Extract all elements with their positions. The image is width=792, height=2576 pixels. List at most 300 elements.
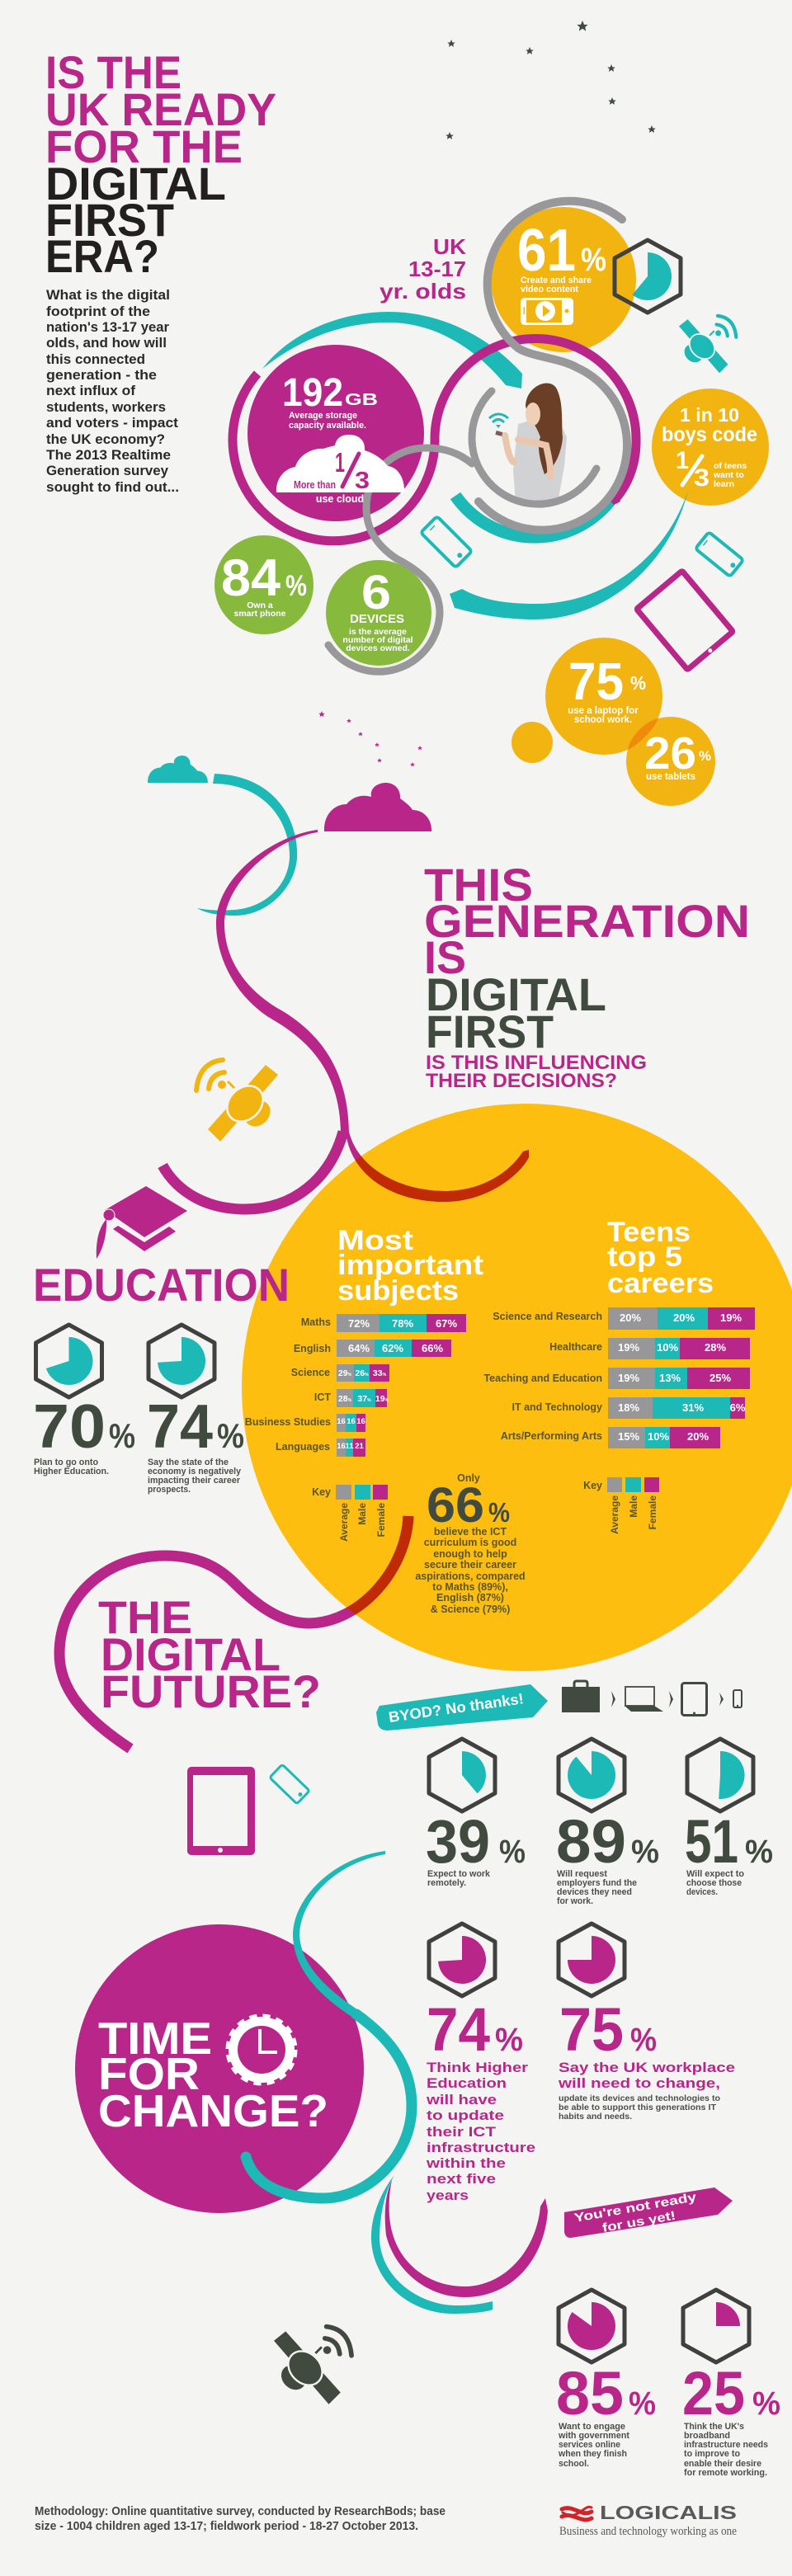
intro text block: generation - the — [46, 367, 157, 383]
stat: 84 percent smart phone: Own a — [247, 600, 273, 610]
stat: 51 percent: Will expect to — [686, 1869, 744, 1879]
row: english: 64% — [348, 1342, 370, 1354]
title: FIRST — [45, 194, 174, 246]
connector: teal arc top — [262, 312, 522, 389]
hexagon pie 51 — [687, 1739, 753, 1811]
row: arts and performing arts: 20% — [687, 1430, 709, 1443]
methodology footnote — [35, 2504, 446, 2533]
stat: 39 percent: remotely. — [427, 1878, 466, 1888]
bar chart: most important subjects — [245, 1314, 466, 1457]
stat: 61 percent video content: Create and share — [521, 275, 592, 285]
icon: teal satellite — [679, 316, 736, 373]
label: UK 13-17 yr. olds: UK — [433, 234, 466, 259]
disc: time for change — [75, 1924, 364, 2213]
stat: 74 percent higher education: Education — [427, 2076, 507, 2091]
icon: magenta cloud — [324, 783, 431, 831]
row: it and technology: IT and Technology — [512, 1401, 602, 1413]
row: ict: 37% — [357, 1394, 371, 1404]
row: ict — [314, 1389, 389, 1407]
stat: 39 percent: Expect to work — [427, 1869, 491, 1879]
stat: 74 percent: Say the state of the — [148, 1458, 229, 1467]
stat: 61 percent video content: video content — [521, 285, 578, 294]
row: teaching and education: 13% — [659, 1372, 681, 1384]
stat: 85 percent government services: services online — [559, 2440, 620, 2450]
hexagon pie: 61 percent — [615, 240, 681, 313]
heading: the digital future — [98, 1591, 321, 1717]
stat: 1 in 10 boys code: 1 in 10 — [680, 404, 739, 426]
row: science and research: 20% — [620, 1312, 641, 1324]
hexagon pie 85 — [559, 2290, 625, 2362]
icon: gear clock — [228, 2016, 295, 2084]
row: business studies: 16 — [356, 1417, 365, 1426]
stat: 89 percent: 89 — [556, 1807, 626, 1876]
title: UK READY — [45, 83, 276, 135]
hexagon pie 89 — [559, 1739, 625, 1811]
row: english — [294, 1340, 451, 1357]
row: science and research: Science and Research — [493, 1311, 602, 1322]
legend: careers key: Male — [628, 1495, 639, 1518]
stat: six devices green circle: is the average — [349, 627, 407, 637]
icon: teal phone right — [695, 532, 743, 577]
legend: careers key: Female — [647, 1495, 658, 1529]
intro text block — [46, 287, 179, 495]
row: teaching and education: Teaching and Education — [483, 1373, 602, 1384]
stat: 1 in 10 boys code: learn — [714, 479, 734, 489]
stat: 85 percent government services: % — [629, 2385, 656, 2422]
stat: only 66 percent ICT curriculum: believe the ICT — [434, 1526, 507, 1538]
stat: 51 percent: devices. — [686, 1887, 718, 1897]
stat: 74 percent: % — [217, 1416, 244, 1455]
intro text block: Generation survey — [46, 463, 169, 478]
connector: teal arc from cloud — [197, 774, 297, 916]
icon: tablet — [681, 1683, 706, 1716]
connector: red overlap of curve on yellow circle — [346, 1516, 414, 1615]
stat: 89 percent: employers fund the — [557, 1878, 637, 1888]
legend: subjects key: Male — [356, 1503, 368, 1525]
stat: 75 percent laptop and 26 percent tablets circles: use tablets — [646, 772, 695, 782]
title: ERA? — [45, 230, 159, 282]
stat: 74 percent: 74 — [147, 1392, 213, 1461]
heading: the digital future: DIGITAL — [101, 1628, 280, 1680]
hexagon pie 75 magenta — [559, 1924, 625, 1996]
stat: 39 percent: % — [499, 1834, 526, 1870]
stat: 89 percent: Will request — [557, 1869, 607, 1879]
stat: 85 percent government services: 85 — [556, 2359, 624, 2428]
icon: laptop — [625, 1687, 663, 1712]
row: science: 33% — [373, 1368, 387, 1378]
icon: teal phone — [421, 516, 472, 567]
legend: subjects key — [312, 1485, 388, 1542]
stat: only 66 percent ICT curriculum: & Science (79%) — [431, 1604, 510, 1615]
row: science and research: 20% — [673, 1312, 695, 1324]
row: languages: Languages — [276, 1441, 330, 1453]
icon: magenta tablet — [637, 571, 734, 671]
connector: magenta curve around digital future — [59, 1516, 408, 1749]
hexagon pie 70 — [36, 1325, 102, 1397]
heading: most important subjects: subjects — [337, 1275, 459, 1307]
stat: 74 percent higher education: will have — [426, 2093, 497, 2107]
stat: 89 percent: for work. — [557, 1896, 593, 1906]
stat: 1 in 10 boys code: boys code — [662, 423, 757, 446]
stat: 74 percent higher education: 74 — [427, 1995, 490, 2064]
row: ict: 19% — [375, 1394, 389, 1404]
stat: 84 percent smart phone — [214, 535, 314, 634]
subheading: is this influencing their decisions — [426, 1052, 647, 1092]
heading: teens top 5 careers: careers — [607, 1268, 714, 1299]
connector: grey ring from 61 percent circle round the photo — [478, 201, 627, 530]
stat: 51 percent: choose those — [686, 1878, 742, 1888]
legend: subjects key: Average — [338, 1503, 350, 1542]
legend: careers key — [583, 1477, 659, 1534]
logo: Logicalis: Business and technology working as one — [559, 2525, 737, 2538]
stat: only 66 percent ICT curriculum: % — [488, 1497, 510, 1528]
stat: 74 percent — [147, 1325, 244, 1495]
heading: this generation is digital first: FIRST — [426, 1005, 554, 1057]
heading: teens top 5 careers — [607, 1217, 714, 1299]
heading: this generation is digital first: IS — [424, 931, 466, 983]
hexagon pie 39 — [429, 1739, 495, 1811]
stat: 74 percent: impacting their career — [148, 1476, 241, 1486]
stat: 74 percent higher education: % — [495, 2022, 523, 2058]
row: science: 26% — [355, 1368, 369, 1378]
stat: 75 percent laptop and 26 percent tablets circles — [512, 638, 715, 806]
heading: education: EDUCATION — [33, 1259, 290, 1311]
legend: careers key: Key — [583, 1480, 602, 1491]
stat: 75 percent laptop and 26 percent tablets circles: % — [699, 748, 711, 764]
connector: teal lower swoosh — [450, 491, 688, 619]
stat: 70 percent: Plan to go onto — [34, 1458, 98, 1467]
stat: six devices green circle — [326, 560, 431, 666]
banner: BYOD no thanks — [376, 1684, 548, 1731]
row: teaching and education: 19% — [618, 1372, 639, 1384]
row: maths: 72% — [348, 1317, 370, 1330]
stat: only 66 percent ICT curriculum: enough to help — [433, 1548, 507, 1560]
stat: 89 percent: devices they need — [557, 1887, 632, 1897]
big yellow circle — [242, 1104, 792, 1671]
stat: 51 percent — [685, 1739, 773, 1897]
heading: teens top 5 careers: Teens — [607, 1217, 691, 1248]
row: healthcare: 19% — [618, 1341, 639, 1354]
row: arts and performing arts — [501, 1427, 720, 1448]
stat: 25 percent broadband: enable their desire — [684, 2459, 761, 2469]
stat: only 66 percent ICT curriculum: to Maths (89%), — [432, 1581, 508, 1593]
row: arts and performing arts: 15% — [618, 1430, 639, 1443]
label: UK 13-17 yr. olds — [380, 234, 466, 304]
intro text block: olds, and how will — [46, 335, 167, 351]
stat: 61 percent video content: 61 — [517, 218, 576, 284]
stat: six devices green circle: 6 — [361, 566, 391, 619]
stat: 75 percent laptop and 26 percent tablets circles: % — [630, 672, 646, 694]
label: UK 13-17 yr. olds: yr. olds — [380, 279, 466, 304]
stat disc: 192GB storage: Average storage — [289, 411, 357, 421]
connector: red overlap on yellow circle — [355, 1150, 529, 1202]
stars: dark cluster — [446, 21, 656, 139]
icon: white cloud, more than one third use cloud: More than — [294, 478, 336, 491]
stat disc: 192GB storage: capacity available. — [289, 421, 366, 431]
row: healthcare: Healthcare — [549, 1341, 602, 1353]
photo illustration: girl with phone — [495, 383, 567, 503]
stat: 1 in 10 boys code: 1 — [676, 447, 689, 474]
stat: six devices green circle: devices owned. — [346, 643, 410, 653]
stat: 74 percent higher education: years — [427, 2188, 469, 2203]
banner: you're not ready for us yet — [564, 2187, 733, 2238]
heading: this generation is digital first: THIS — [424, 859, 533, 911]
icon: dark satellite — [274, 2327, 351, 2404]
stat: only 66 percent ICT curriculum: secure their career — [424, 1559, 516, 1571]
title: IS THE — [45, 46, 182, 98]
row: languages: 16 — [337, 1442, 346, 1451]
stat: 74 percent: economy is negatively — [148, 1467, 242, 1476]
connector: grey S curve from photo to devices — [328, 448, 472, 671]
stat: 70 percent: Higher Education. — [34, 1467, 109, 1476]
stat: 75 percent laptop and 26 percent tablets circles: 75 — [568, 652, 624, 711]
stat: 1 in 10 boys code: of teens — [714, 461, 747, 471]
stat: 70 percent — [33, 1325, 135, 1476]
banner: you're not ready for us yet: for us yet! — [601, 2209, 676, 2235]
connector: magenta lower arc — [385, 2180, 548, 2297]
stat: 61 percent video content — [491, 207, 636, 352]
subheading: is this influencing their decisions: IS THIS INFLUENCING — [426, 1052, 647, 1074]
row: it and technology: 31% — [682, 1401, 704, 1414]
icon: briefcase — [562, 1681, 600, 1712]
subheading: is this influencing their decisions: THEIR DECISIONS? — [426, 1070, 617, 1092]
heading: the digital future: FUTURE? — [101, 1665, 321, 1717]
row: science: 29% — [338, 1368, 352, 1378]
title — [45, 46, 276, 282]
stat: 25 percent broadband: to improve to — [684, 2449, 740, 2459]
stat: 85 percent government services — [556, 2290, 656, 2469]
stat: 25 percent broadband: Think the UK's — [684, 2422, 744, 2432]
heading: this generation is digital first: GENERATION — [424, 895, 750, 947]
heading: the digital future: THE — [98, 1591, 192, 1643]
row: arts and performing arts: 10% — [648, 1430, 669, 1443]
hexagon pie 74 magenta — [429, 1924, 495, 1996]
intro text block: this connected — [46, 351, 145, 367]
icon: teal cloud — [148, 756, 208, 783]
intro text block: the UK economy? — [46, 431, 165, 447]
row: english: English — [294, 1343, 331, 1354]
connector: magenta arc left of satellite — [163, 1132, 343, 1209]
stat: 75 percent UK workplace: habits and needs. — [559, 2112, 632, 2122]
stat: 74 percent higher education: next five — [427, 2172, 496, 2187]
stat: 70 percent: 70 — [33, 1392, 106, 1461]
stat: only 66 percent ICT curriculum: curriculum is good — [424, 1537, 516, 1548]
methodology footnote: size - 1004 children aged 13-17; fieldwork period - 18-27 October 2013. — [35, 2519, 418, 2533]
stat: only 66 percent ICT curriculum: Only — [457, 1472, 480, 1484]
icon: white cloud, more than one third use cloud: use cloud — [316, 493, 364, 505]
bar chart: teens top 5 careers — [483, 1307, 755, 1448]
row: languages: 11 — [345, 1442, 354, 1451]
intro text block: next influx of — [46, 383, 135, 398]
stat: 1 in 10 boys code — [652, 389, 769, 506]
row: science and research — [493, 1307, 755, 1330]
intro text block: and voters - impact — [46, 415, 178, 431]
banner: BYOD no thanks: BYOD? No thanks! — [388, 1690, 525, 1726]
connector: grey inner arc around photo — [472, 391, 596, 504]
stat: 25 percent broadband: 25 — [682, 2359, 745, 2428]
row: languages — [276, 1439, 365, 1457]
logo: Logicalis: LOGICALIS — [600, 2502, 737, 2523]
icon: phone with play button — [521, 298, 573, 325]
stat: 25 percent broadband: for remote working. — [684, 2468, 767, 2478]
icon: white cloud, more than one third use cloud — [276, 435, 404, 505]
stat: 70 percent: % — [109, 1416, 135, 1455]
stat: 39 percent — [426, 1739, 526, 1888]
stat: 25 percent broadband: % — [752, 2385, 780, 2422]
stat: only 66 percent ICT curriculum: aspirations, compared — [415, 1571, 526, 1582]
title: FOR THE — [45, 120, 243, 172]
heading: most important subjects: important — [337, 1250, 483, 1281]
stat: 74 percent higher education: infrastructure — [427, 2140, 535, 2155]
row: science and research: 19% — [720, 1312, 742, 1324]
heading: this generation is digital first — [424, 859, 750, 1057]
stat disc: 192GB storage: 192 — [282, 371, 343, 415]
heading: this generation is digital first: DIGITAL — [426, 968, 606, 1020]
title: DIGITAL — [45, 158, 226, 210]
disc: time for change: CHANGE? — [98, 2085, 328, 2136]
row: science — [291, 1364, 389, 1382]
connector: teal curve bottom through disc — [246, 2014, 412, 2198]
stat: 51 percent: % — [745, 1834, 773, 1870]
stat: 25 percent broadband — [682, 2290, 780, 2478]
row: healthcare: 28% — [705, 1341, 726, 1354]
row: business studies: Business Studies — [245, 1416, 331, 1428]
stat: 85 percent government services: with government — [558, 2431, 629, 2441]
row: teaching and education — [483, 1368, 750, 1389]
row: business studies: 16 — [346, 1417, 356, 1426]
row: arts and performing arts: Arts/Performing Arts — [501, 1430, 602, 1442]
icon: wifi signal — [489, 414, 508, 428]
row: it and technology: 6% — [730, 1401, 746, 1414]
stat: 75 percent laptop and 26 percent tablets circles: 26 — [644, 728, 696, 779]
intro text block: nation's 13-17 year — [46, 319, 169, 335]
disc: time for change: TIME — [98, 2013, 212, 2064]
row: maths — [301, 1314, 466, 1332]
legend: subjects key: Key — [312, 1486, 331, 1498]
stat disc: 192GB storage: GB — [345, 391, 378, 409]
stat: 74 percent higher education: within the — [426, 2156, 506, 2171]
stat: 75 percent UK workplace: update its devices and technologies to — [559, 2093, 720, 2103]
hexagon pie 25 — [683, 2290, 749, 2362]
row: maths: 67% — [436, 1317, 457, 1330]
stat: 74 percent higher education: Think Higher — [427, 2060, 529, 2075]
stat: 51 percent: 51 — [685, 1807, 738, 1876]
connector: magenta end over teal arc — [609, 487, 620, 505]
stat: 74 percent: prospects. — [148, 1485, 191, 1495]
row: it and technology — [512, 1397, 746, 1419]
hexagon pie 74 — [148, 1325, 214, 1397]
stat: 75 percent UK workplace: be able to support this generations IT — [559, 2103, 717, 2112]
row: science: Science — [291, 1367, 330, 1378]
stat: 75 percent UK workplace: will need to change, — [558, 2076, 720, 2091]
row: teaching and education: 25% — [710, 1372, 731, 1384]
disc: time for change: FOR — [98, 2048, 200, 2099]
row: healthcare: 10% — [657, 1341, 678, 1354]
row: business studies: 16 — [337, 1417, 346, 1426]
icon: magenta tablet portrait — [187, 1767, 255, 1855]
intro text block: footprint of the — [46, 304, 150, 319]
stat: 85 percent government services: Want to engage — [559, 2422, 625, 2432]
stat: only 66 percent ICT curriculum: English (87%) — [436, 1592, 504, 1604]
icon: graduation cap — [97, 1186, 187, 1259]
row: healthcare — [549, 1338, 750, 1359]
stat: 85 percent government services: when they finish — [558, 2449, 627, 2459]
row: english: 66% — [422, 1342, 443, 1354]
label: UK 13-17 yr. olds: 13-17 — [408, 257, 466, 281]
logo: Logicalis — [559, 2502, 737, 2538]
stat: 75 percent laptop and 26 percent tablets circles: use a laptop for — [568, 706, 639, 716]
row: maths: Maths — [301, 1316, 331, 1328]
stat: 75 percent UK workplace: Say the UK workplace — [559, 2060, 735, 2075]
heading: most important subjects — [337, 1225, 483, 1307]
row: languages: 21 — [355, 1442, 364, 1451]
stat: 75 percent UK workplace — [558, 1924, 735, 2122]
ring: magenta connector around storage disc and photo — [233, 338, 636, 541]
intro text block: students, workers — [46, 399, 166, 415]
stars: magenta cluster — [318, 711, 422, 766]
icon: red swirl — [562, 2507, 592, 2520]
stat disc: 192GB storage — [248, 345, 424, 521]
stat: 89 percent: % — [631, 1834, 659, 1870]
row: maths: 78% — [392, 1317, 413, 1330]
banner: you're not ready for us yet: You're not ready — [573, 2190, 698, 2225]
row: english: 62% — [382, 1342, 403, 1354]
icon: yellow satellite — [196, 1060, 278, 1142]
stat: 1 in 10 boys code: 3 — [694, 464, 710, 492]
stat: only 66 percent ICT curriculum: 66 — [427, 1477, 484, 1533]
stat: only 66 percent ICT curriculum — [415, 1472, 526, 1615]
intro text block: What is the digital — [46, 287, 170, 303]
stat: six devices green circle: DEVICES — [350, 612, 404, 626]
connector: teal lower arc — [371, 2175, 493, 2314]
heading: teens top 5 careers: top 5 — [607, 1241, 682, 1273]
stat: 74 percent higher education: their ICT — [427, 2125, 496, 2140]
stat: 39 percent: 39 — [426, 1807, 490, 1876]
intro text block: sought to find out... — [46, 479, 179, 495]
connector: teal inner arc — [455, 496, 614, 537]
stat: six devices green circle: number of digital — [342, 635, 413, 645]
stat: 75 percent laptop and 26 percent tablets circles: school work. — [574, 715, 632, 725]
row: ict: 28% — [338, 1394, 352, 1404]
stat: 84 percent smart phone: 84 — [221, 549, 280, 607]
stat: 25 percent broadband: broadband — [684, 2431, 730, 2441]
legend: subjects key: Female — [375, 1503, 387, 1537]
stat: 74 percent higher education — [426, 1924, 535, 2203]
heading: most important subjects: Most — [337, 1225, 413, 1256]
methodology footnote: Methodology: Online quantitative survey, conducted by ResearchBods; base — [35, 2504, 446, 2518]
stat: 75 percent UK workplace: % — [630, 2022, 657, 2058]
connector: magenta arc over yellow circle — [346, 1132, 529, 1202]
intro text block: The 2013 Realtime — [46, 447, 171, 463]
connector: teal curve top through disc — [293, 1851, 385, 2018]
row: business studies — [245, 1414, 365, 1432]
legend: careers key: Average — [609, 1495, 620, 1534]
row: ict: ICT — [314, 1392, 331, 1403]
icon: white cloud, more than one third use cloud: 3 — [355, 468, 370, 494]
stat: 89 percent — [556, 1739, 659, 1906]
stat: 25 percent broadband: infrastructure needs — [684, 2440, 768, 2450]
stat: 75 percent UK workplace: 75 — [559, 1995, 624, 2064]
connector: magenta S curve from cloud — [216, 830, 349, 1133]
stat: 85 percent government services: school. — [559, 2459, 589, 2469]
stat: 74 percent higher education: to update — [427, 2108, 504, 2123]
stat: 1 in 10 boys code: want to — [713, 470, 744, 480]
icon: teal phone small — [270, 1764, 309, 1804]
icon row: briefcase laptop tablet phone — [562, 1681, 742, 1716]
stat: 84 percent smart phone: % — [285, 570, 307, 602]
stat: 61 percent video content: % — [581, 242, 606, 278]
icon: white cloud, more than one third use cloud: 1 — [335, 447, 345, 478]
